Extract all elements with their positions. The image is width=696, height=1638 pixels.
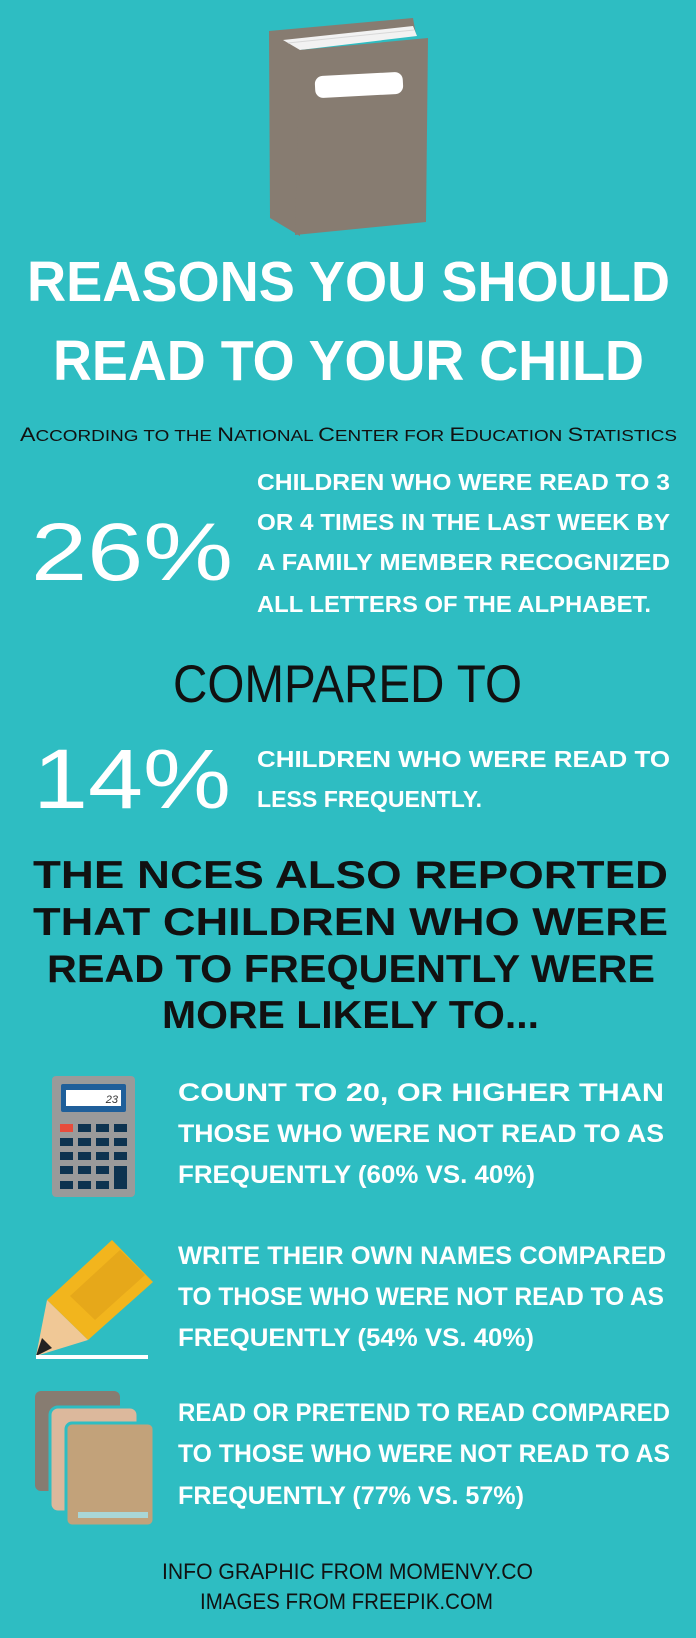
paragraph: NCES: THE NCES ALSO REPORTED — [33, 854, 668, 897]
item text: write: FREQUENTLY (54% VS. 40%) — [178, 1324, 534, 1352]
stat text 26% — [257, 469, 670, 617]
subtitle: ACCORDING TO THE NATIONAL CENTER FOR EDUCATION STATISTICS — [20, 425, 677, 446]
title: READ TO YOUR CHILD — [53, 329, 644, 393]
item text: read — [178, 1399, 670, 1510]
stat: 26%: 26% — [31, 507, 233, 598]
item text: read: FREQUENTLY (77% VS. 57%) — [178, 1482, 524, 1510]
item text: count: FREQUENTLY (60% VS. 40%) — [178, 1161, 535, 1189]
footer: INFO GRAPHIC FROM MOMENVY.CO — [162, 1559, 533, 1584]
title — [27, 250, 670, 393]
footer — [162, 1559, 533, 1614]
icon: book — [269, 18, 428, 236]
item text: read: TO THOSE WHO WERE NOT READ TO AS — [178, 1440, 670, 1468]
stat text 26%: OR 4 TIMES IN THE LAST WEEK BY — [257, 509, 670, 535]
icon: calculator — [52, 1076, 135, 1197]
item text: write: WRITE THEIR OWN NAMES COMPARED — [178, 1242, 666, 1270]
icon: books — [35, 1391, 154, 1526]
stat: 14%: 14% — [33, 732, 231, 826]
stat text 26%: ALL LETTERS OF THE ALPHABET. — [257, 591, 651, 617]
stat text 26%: A FAMILY MEMBER RECOGNIZED — [257, 549, 670, 575]
icon: pencil — [36, 1240, 153, 1359]
stat text 26%: CHILDREN WHO WERE READ TO 3 — [257, 469, 670, 495]
stat text 14%: LESS FREQUENTLY. — [257, 786, 482, 812]
item text: count: COUNT TO 20, OR HIGHER THAN — [178, 1079, 664, 1107]
stat: 14% — [33, 732, 670, 826]
paragraph: NCES — [33, 854, 668, 1037]
item text: write — [178, 1242, 666, 1352]
stat: 26% — [31, 469, 670, 617]
footer: IMAGES FROM FREEPIK.COM — [200, 1589, 493, 1614]
paragraph: NCES: THAT CHILDREN WHO WERE — [33, 901, 668, 944]
item text: count — [178, 1079, 664, 1189]
paragraph: NCES: MORE LIKELY TO... — [162, 994, 539, 1037]
icon: calculator: 23 — [105, 1094, 119, 1106]
paragraph: NCES: READ TO FREQUENTLY WERE — [47, 948, 655, 991]
item text: count: THOSE WHO WERE NOT READ TO AS — [178, 1120, 664, 1148]
heading: compared to: COMPARED TO — [173, 655, 522, 714]
item text: write: TO THOSE WHO WERE NOT READ TO AS — [178, 1283, 664, 1311]
stat text 14%: CHILDREN WHO WERE READ TO — [257, 746, 670, 772]
title: REASONS YOU SHOULD — [27, 250, 670, 314]
stat text 14% — [257, 746, 670, 812]
item text: read: READ OR PRETEND TO READ COMPARED — [178, 1399, 670, 1427]
